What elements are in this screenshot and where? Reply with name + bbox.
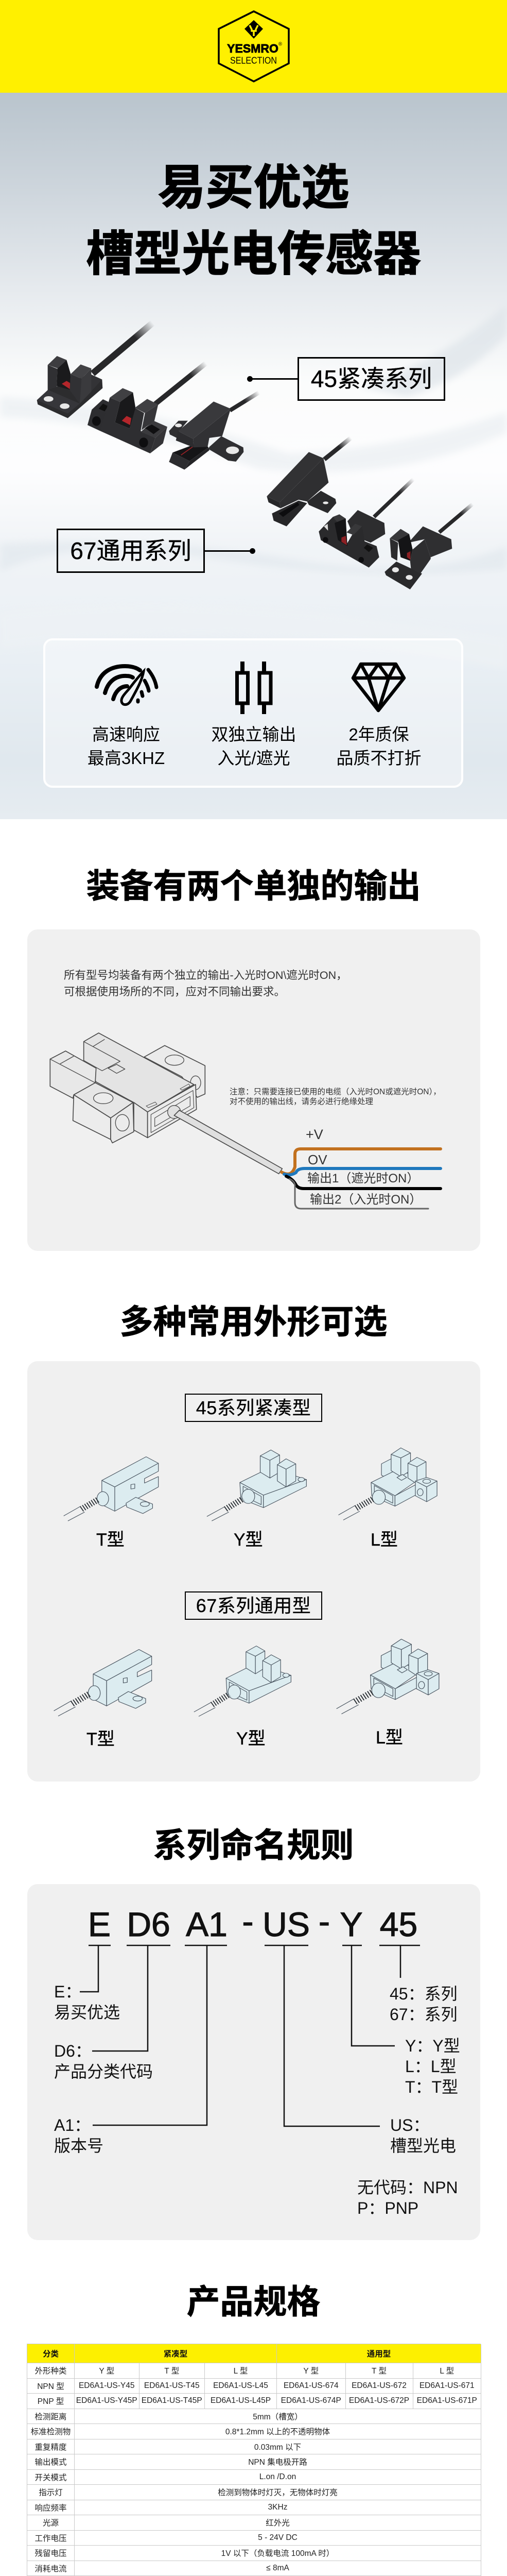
callout leader dot and line [247, 376, 298, 382]
drawing: 45 series L [339, 1448, 437, 1520]
wire label: +V: +V [306, 1127, 323, 1142]
table: product specifications: ED6A1-US-672P [349, 2396, 409, 2405]
naming label: NPN/PNP [357, 2178, 458, 2217]
table: product specifications: Y 型 [99, 2367, 114, 2376]
naming code letters: A1 [186, 1905, 228, 1943]
label box: 45系列紧凑型 [185, 1394, 322, 1422]
label: 67 Y型: Y型 [236, 1729, 266, 1749]
table: product specifications: 检测距离 [34, 2413, 67, 2421]
table: product specifications: 残留电压 [34, 2549, 67, 2558]
title: 易买优选 槽型光电传感器: 槽型光电传感器 [86, 227, 421, 281]
callout label box: 45紧凑系列 [311, 365, 432, 392]
table: product specifications: ED6A1-US-L45P [211, 2396, 271, 2405]
table: product specifications: NPN 集电极开路 [248, 2458, 307, 2467]
table: product specifications: 标准检测物 [31, 2428, 71, 2436]
wire label: output 1: 输出1（遮光时ON） [307, 1172, 419, 1185]
table: product specifications: 0.8*1.2mm 以上的不透明物体 [225, 2428, 330, 2436]
naming label: A1: 版本号 [54, 2137, 103, 2155]
table: product specifications: ED6A1-US-Y45 [79, 2381, 135, 2390]
feature text: 2年质保: 2年质保 [348, 725, 409, 744]
table: product specifications: ED6A1-US-T45P [142, 2396, 202, 2405]
logo: YESMRO SELECTION: SELECTION [230, 55, 277, 66]
table: product specifications: ED6A1-US-674P [281, 2396, 341, 2405]
naming code letters: 45 [380, 1905, 417, 1943]
table: product specifications: ED6A1-US-674 [284, 2381, 339, 2390]
icon: high speed gauge [95, 664, 159, 706]
logo: YESMRO SELECTION [218, 10, 290, 82]
naming code letters: - [319, 1902, 330, 1940]
product: compact L sensor [88, 363, 206, 453]
table: product specifications: ≤ 8mA [266, 2564, 289, 2572]
label: 45 L型: L型 [371, 1530, 398, 1550]
table: product specifications: 5mm（槽宽） [253, 2413, 303, 2421]
table: product specifications: T 型 [372, 2367, 387, 2376]
drawing: 45 series Y [207, 1450, 306, 1521]
drawing: 45 series T [64, 1457, 159, 1521]
table: product specifications: 0.03mm 以下 [254, 2443, 301, 2452]
table: product specifications: 3KHz [268, 2503, 287, 2512]
feature text: 双独立输出: 双独立输出 [211, 725, 296, 744]
table: product specifications: ED6A1-US-L45 [213, 2381, 268, 2390]
naming label: A1 [54, 2116, 103, 2155]
product: general L sensor [319, 479, 413, 568]
table: product specifications: ED6A1-US-671P [417, 2396, 477, 2405]
text: wiring note [230, 1087, 441, 1106]
feature text: 高速响应 [88, 725, 165, 768]
text: wiring note: 注意：只需要连接已使用的电缆（入光时ON或遮光时ON）， [230, 1088, 441, 1096]
table: product specifications: 开关模式 [34, 2473, 67, 2482]
naming connector lines [80, 1945, 420, 2126]
logo: YESMRO SELECTION: ® [278, 41, 283, 47]
naming code letters: US [263, 1905, 310, 1943]
naming label: A1: A1： [54, 2116, 91, 2134]
drawing: 67 series L [337, 1639, 439, 1714]
wire label: output 2: 输出2（入光时ON） [310, 1193, 422, 1207]
label: 45 T型: T型 [96, 1530, 125, 1550]
feature text: 2年质保: 品质不打折 [337, 749, 421, 768]
feature text: 2年质保 [337, 725, 421, 768]
naming label: E: E： [54, 1982, 81, 2001]
table: product specifications: 消耗电流 [34, 2565, 67, 2573]
naming label: US [390, 2116, 456, 2155]
label: 67 L型: L型 [376, 1728, 403, 1748]
naming label: 45/67 series: 67：系列 [390, 2005, 458, 2024]
feature text: 高速响应: 最高3KHZ [88, 749, 165, 768]
hero background panel [0, 93, 507, 819]
table: product specifications [27, 2344, 481, 2576]
naming label: Y/L/T: L：L型 [405, 2057, 457, 2076]
product photos: six black slot sensors [37, 321, 474, 589]
table: product specifications: 指示灯 [39, 2488, 63, 2497]
table: product specifications: ED6A1-US-T45 [144, 2381, 200, 2390]
table: product specifications: 工作电压 [34, 2534, 67, 2543]
label: 67 T型: T型 [86, 1730, 115, 1749]
product: general T sensor [267, 438, 351, 527]
table: product specifications: 光源 [43, 2519, 59, 2528]
table: product specifications: ED6A1-US-671 [419, 2381, 475, 2390]
heading: 系列命名规则: 系列命名规则 [153, 1826, 354, 1864]
feature text: 高速响应: 高速响应 [92, 725, 160, 744]
table: product specifications: L 型 [234, 2367, 248, 2376]
feature text: 双独立输出: 入光/遮光 [217, 749, 290, 768]
table: product specifications: 紧凑型 [164, 2350, 187, 2359]
table: product specifications: 通用型 [367, 2350, 391, 2359]
diagram: sensor line drawing with cable [49, 1032, 283, 1175]
naming label: D6: 产品分类代码 [54, 2062, 153, 2081]
logo: YESMRO SELECTION: YESMRO [227, 42, 278, 55]
icon: diamond quality [351, 663, 406, 712]
label: 45 Y型: Y型 [234, 1530, 263, 1550]
naming label: US: 槽型光电 [390, 2137, 456, 2155]
naming label: Y/L/T: Y：Y型 [405, 2037, 460, 2055]
naming code letters: - [242, 1902, 253, 1940]
panel: two outputs wiring [27, 929, 480, 1251]
drawing: 67 series T [54, 1650, 152, 1716]
table: product specifications: Y 型 [303, 2367, 319, 2376]
naming label: US: US： [390, 2116, 429, 2134]
naming label: Y/L/T [405, 2037, 460, 2096]
table: product specifications: ED6A1-US-672 [352, 2381, 407, 2390]
naming label: D6 [54, 2042, 153, 2081]
callout: 67通用系列 [57, 529, 255, 573]
diagram: coloured wires [280, 1147, 442, 1210]
naming label: E: 易买优选 [54, 2003, 120, 2022]
text: wiring note: 对不使用的输出线，请务必进行绝缘处理 [230, 1097, 373, 1106]
panel: three key features [43, 638, 463, 788]
title: 易买优选 槽型光电传感器: 易买优选 [158, 161, 349, 214]
text: output description: 可根据使用场所的不同，应对不同输出要求。 [64, 986, 285, 998]
callout label box [57, 529, 205, 573]
table: product specifications: 5 - 24V DC [258, 2533, 298, 2542]
wire label: 0V: OV [308, 1152, 327, 1167]
title: 易买优选 槽型光电传感器 [86, 161, 421, 281]
text: output description: 所有型号均装备有两个独立的输出-入光时ON\遮光时ON， [64, 969, 347, 981]
table: product specifications: 1V 以下（负载电流 100mA 时） [221, 2549, 334, 2558]
naming label: 45/67 series: 45：系列 [390, 1985, 458, 2003]
naming label: 45/67 series [390, 1985, 458, 2024]
callout leader line and dot [205, 548, 255, 554]
table: product specifications: 红外光 [266, 2519, 290, 2528]
table: product specifications: 输出模式 [34, 2458, 67, 2467]
panel: housing shapes [27, 1361, 480, 1782]
naming label: NPN/PNP: P：PNP [357, 2199, 418, 2217]
table: product specifications: NPN 型 [37, 2382, 64, 2391]
heading: 产品规格: 产品规格 [186, 2283, 320, 2320]
table: product specifications: 重复精度 [34, 2443, 67, 2452]
naming code letters: E [88, 1905, 111, 1943]
naming label: Y/L/T: T：T型 [405, 2078, 458, 2096]
product: compact Y sensor [37, 323, 153, 418]
heading: 多种常用外形可选: 多种常用外形可选 [119, 1303, 387, 1341]
callout: 45紧凑系列 [247, 357, 445, 401]
callout label box: 67通用系列 [70, 537, 191, 564]
product: compact T sensor [169, 393, 259, 470]
table: product specifications: L.on /D.on [259, 2472, 296, 2481]
table: product specifications: 分类 [43, 2350, 59, 2359]
header band with logo [0, 0, 507, 93]
isometric sensor drawings [54, 1448, 440, 1717]
text: output description [64, 969, 347, 998]
naming label: NPN/PNP: 无代码：NPN [357, 2178, 458, 2197]
feature text: 双独立输出 [211, 725, 296, 768]
table: product specifications: PNP 型 [38, 2397, 64, 2406]
heading: 装备有两个单独的输出: 装备有两个单独的输出 [86, 867, 421, 905]
naming label: D6: D6： [54, 2042, 92, 2060]
naming code letters: D6 [127, 1905, 170, 1943]
table: product specifications: L 型 [440, 2367, 454, 2376]
label box: 67系列通用型: 67系列通用型 [196, 1595, 311, 1616]
drawing: 67 series Y [194, 1646, 291, 1716]
table: product specifications: 外形种类 [34, 2367, 67, 2376]
table: product specifications: 响应频率 [34, 2504, 67, 2513]
product: general Y sensor [384, 504, 473, 589]
naming label: E [54, 1982, 120, 2022]
label box: 45系列紧凑型: 45系列紧凑型 [196, 1397, 311, 1418]
table: product specifications: T 型 [164, 2367, 179, 2376]
naming code letters: Y [340, 1905, 363, 1943]
table: product specifications: 检测到物体时灯灭，无物体时灯亮 [218, 2488, 338, 2497]
panel: naming rule [27, 1884, 480, 2240]
table: product specifications: ED6A1-US-Y45P [76, 2396, 137, 2405]
icon: dual output [235, 662, 273, 714]
callout label box [298, 357, 445, 401]
label box: 67系列通用型 [185, 1591, 322, 1620]
